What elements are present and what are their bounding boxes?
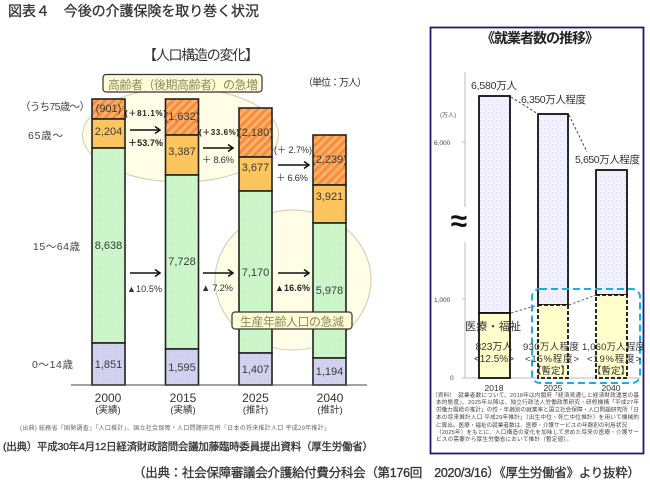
medical and welfare labels: <12.5%>	[474, 354, 514, 365]
source line: (出典）平成30年4月12日経済財政諮問会議加藤臨時委員提出資料（厚生労働省）	[3, 440, 373, 453]
decline rates: working age: ▲16.6%	[275, 283, 310, 293]
stacked bar: 2040	[312, 135, 347, 385]
source note: に算出。医療・福祉の就業者数は、医療・介護サービスの年齢別の利用状況	[436, 421, 627, 429]
total labels: 5,650万人程度	[575, 153, 640, 166]
stacked bar: 2000: 2,204	[95, 126, 122, 138]
age labels	[20, 101, 90, 371]
x-axis year labels: (推計)	[243, 404, 268, 416]
callout: elderly surge: 高齢者（後期高齢者）の急増	[108, 77, 258, 92]
y axis: 1,000	[434, 297, 451, 304]
y axis: 0	[450, 375, 454, 382]
panel heading: 【人口構造の変化】	[143, 47, 259, 63]
figure title: 図表４ 今後の介護保険を取り巻く状況	[8, 3, 259, 19]
highlight ellipse: working age	[215, 210, 371, 350]
decline rates: working age: ▲ 7.2%	[201, 283, 234, 294]
unit note: （単位：万人）	[303, 76, 367, 89]
medical and welfare labels: <19%程度>	[587, 353, 641, 365]
x-axis year labels: (推計)	[317, 404, 343, 416]
stacked bar: 2025	[238, 108, 273, 385]
age labels: 15～64歳	[33, 241, 80, 253]
stacked bar: 2015: (1,632)	[165, 111, 199, 123]
panel heading: 《就業者数の推移》	[481, 30, 599, 46]
stacked bar: 2015: 1,595	[168, 362, 196, 374]
medical and welfare labels: 823万人	[476, 342, 512, 353]
arrows: working-age decline	[130, 272, 309, 274]
y axis	[434, 72, 640, 382]
total labels	[471, 80, 640, 166]
bar: 2040	[596, 170, 627, 378]
growth rates: elderly: (＋33.6%)	[199, 128, 239, 137]
age labels: 0～14歳	[32, 359, 74, 371]
panel: employed persons trend	[430, 28, 645, 454]
year labels: 2018	[485, 383, 504, 393]
stacked bar: 2025: 7,170	[242, 267, 269, 279]
stacked bar: 2025: 1,407	[242, 364, 269, 376]
source note: （2025年）をもとに、人口構造の変化を加味して求めた将来の医療・介護サー	[436, 428, 639, 436]
year labels	[485, 383, 621, 393]
growth rates: elderly	[125, 109, 312, 184]
age labels: （うち75歳～）	[20, 101, 90, 113]
highlight ellipse: elderly	[82, 88, 278, 182]
medical and welfare labels: 医療・福祉	[465, 319, 521, 333]
age labels: 65歳～	[28, 130, 64, 142]
growth rates: elderly: ＋53.7%	[128, 138, 163, 148]
bar: 2018	[479, 96, 510, 378]
panel frame	[430, 28, 644, 454]
total labels: 6,580万人	[471, 80, 518, 92]
stacked bar: 2000: 1,851	[95, 359, 122, 371]
x-axis year labels: 2025	[242, 391, 269, 405]
provisional highlight box	[532, 289, 640, 383]
growth rates: elderly: ＋ 6.6%	[276, 173, 309, 184]
overall citation: （出典：社会保障審議会介護給付費分科会（第176回 2020/3/16）《厚生労働省》より抜粋）	[133, 465, 640, 480]
stacked bar: 2040: (2,239)	[312, 154, 347, 166]
source note: 労働力需給の推計」の性・年齢別の就業率と国立社会保障・人口問題研究所「日	[436, 406, 639, 414]
source note: 本の将来推計人口 平成29年推計」（出生中位・死亡中位推計）を用いて機械的	[436, 413, 639, 421]
medical and welfare labels: 930万人程度	[523, 341, 579, 353]
callout: working-age decline: 生産年齢人口の急減	[240, 314, 344, 329]
source note: 本的態度」、2025年以降は、独立行政法人労働政策研究・研修機構「平成27年	[436, 398, 639, 406]
growth rates: elderly: (＋ 2.7%)	[274, 145, 312, 155]
x-axis year labels	[95, 391, 344, 416]
x-axis year labels: (実績)	[95, 404, 121, 416]
stacked bar: 2040: 1,194	[316, 366, 343, 378]
stacked bar: 2025: 3,677	[242, 162, 269, 174]
decline rates: working age: ▲10.5%	[127, 284, 162, 294]
baseline axis	[71, 384, 367, 386]
stacked bar: 2025: (2,180)	[238, 127, 273, 139]
medical and welfare labels: 【暫定】	[592, 365, 630, 377]
stacked bar: 2015: 7,728	[168, 256, 196, 268]
source note: ビスの需要から厚生労働省において推計（暫定値）。	[436, 435, 572, 443]
stacked bar: 2000	[92, 99, 125, 385]
medical and welfare labels	[465, 319, 645, 377]
stacked bar: 2015	[165, 99, 199, 385]
x-axis year labels: 2040	[317, 391, 344, 405]
axis break symbol: ≈	[451, 205, 467, 238]
bar: 2025	[538, 114, 568, 378]
source note: （資料） 就業者数について、2018年は内閣府「経済見通しと経済財政運営の基	[432, 391, 639, 399]
growth rates: elderly: (＋81.1%)	[125, 109, 166, 118]
panel: population structure	[3, 47, 373, 453]
stacked bar: 2040: 5,978	[316, 285, 343, 297]
x-axis year labels: (実績)	[170, 404, 196, 416]
y axis: 6,000	[434, 140, 451, 147]
medical and welfare labels: 1,060万人程度	[582, 341, 645, 353]
medical and welfare labels: 【暫定】	[532, 365, 570, 377]
stacked bar: 2000: 8,638	[95, 240, 122, 252]
stacked bar: 2015: 3,387	[168, 146, 196, 158]
year labels: 2025	[544, 383, 563, 393]
year labels: 2040	[602, 383, 621, 393]
decline rates: working age	[127, 283, 310, 294]
stacked bar: 2000: (901)	[96, 103, 121, 115]
source note	[432, 391, 639, 443]
trend connector lines	[511, 97, 596, 313]
arrows: elderly growth	[130, 130, 309, 165]
y axis: (万人)	[440, 112, 456, 119]
data source note: (出典) 総務省「国勢調査」「人口推計」、国立社会保障・人口問題研究所「日本の将来推計人口 平成29年推計」	[20, 424, 330, 432]
total labels: 6,350万人程度	[521, 93, 586, 106]
x-axis year labels: 2015	[170, 391, 197, 405]
growth rates: elderly: ＋ 8.6%	[202, 155, 235, 166]
medical and welfare labels: <15%程度>	[525, 353, 579, 365]
stacked bar: 2040: 3,921	[316, 191, 343, 203]
x-axis year labels: 2000	[95, 391, 122, 405]
